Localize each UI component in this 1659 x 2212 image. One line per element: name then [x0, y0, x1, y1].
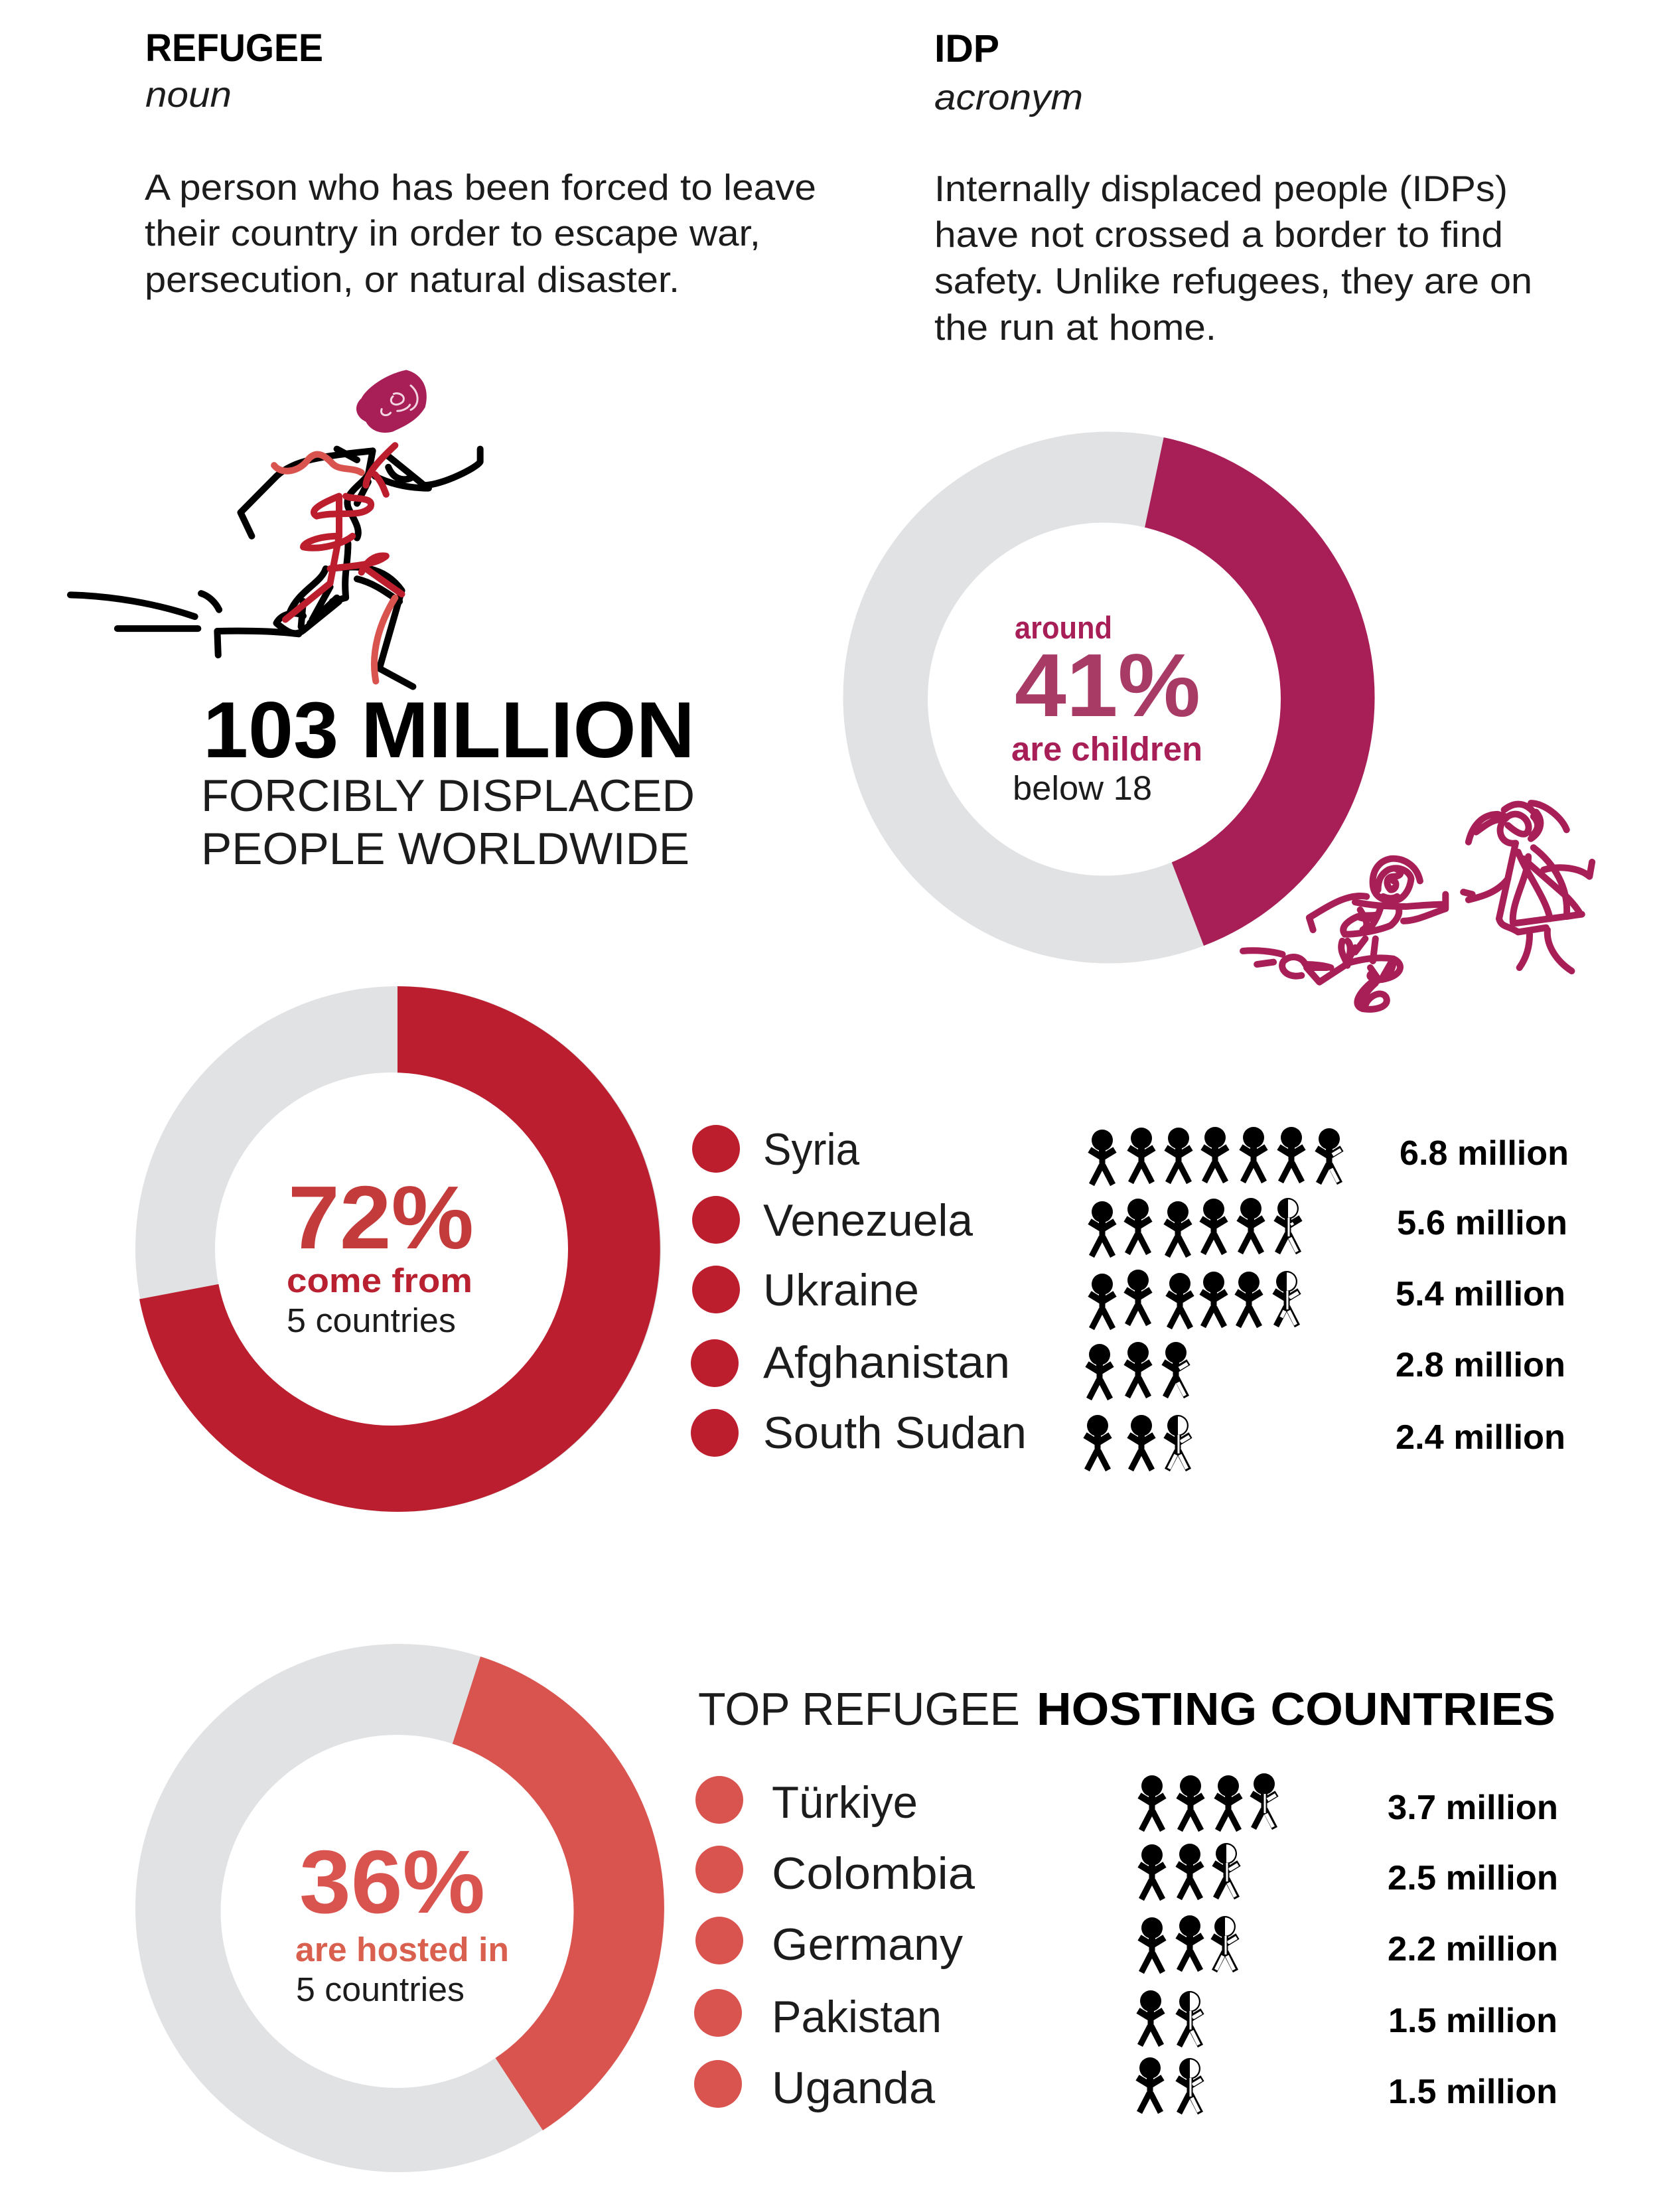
row: Syria — [692, 1124, 1569, 1185]
donut label: 41 percent: below 18 — [1013, 769, 1152, 807]
IDP definition text: have not crossed a border to find — [934, 214, 1503, 255]
row: Germany: 2.2 million — [1388, 1930, 1558, 1968]
illustration: running children — [1243, 803, 1592, 1009]
row: Afghanistan: Afghanistan — [763, 1337, 1010, 1388]
row: Colombia: 2.5 million — [1388, 1859, 1558, 1897]
row: Ukraine — [692, 1265, 1565, 1329]
row: Venezuela — [692, 1195, 1567, 1256]
heading: top refugee hosting countries: HOSTING COUNTRIES — [1037, 1683, 1555, 1735]
row: Venezuela: Venezuela — [763, 1195, 973, 1246]
IDP definition text — [934, 168, 1532, 348]
donut label: 36 percent: are hosted in — [295, 1931, 509, 1968]
list: origin countries — [691, 1124, 1569, 1470]
word class: noun: noun — [145, 75, 232, 115]
donut label: 36 percent: 36% — [299, 1832, 485, 1932]
headline: 103 million — [201, 686, 695, 874]
row: Germany: Germany — [772, 1919, 963, 1970]
donut chart: 41 percent children — [843, 431, 1375, 964]
donut label: 72 percent: come from — [287, 1262, 472, 1299]
IDP definition text: safety. Unlike refugees, they are on — [934, 260, 1532, 301]
boy figure — [1243, 859, 1445, 1009]
illustration: running figure — [70, 370, 480, 687]
row: Germany — [695, 1915, 1558, 1972]
row: South Sudan: South Sudan — [763, 1408, 1027, 1458]
row: Afghanistan — [691, 1337, 1565, 1399]
row: Pakistan: 1.5 million — [1388, 2002, 1557, 2040]
girl figure — [1463, 803, 1592, 971]
donut label: 72 percent: 72% — [288, 1167, 474, 1268]
row: Türkiye: Türkiye — [772, 1777, 918, 1828]
donut label: 36 percent — [295, 1832, 509, 2008]
donut label: 41 percent: 41% — [1015, 635, 1200, 735]
row: Syria: Syria — [763, 1124, 859, 1175]
row: Afghanistan: 2.8 million — [1396, 1346, 1565, 1384]
refugee definition text: A person who has been forced to leave — [145, 167, 816, 208]
donut label: 41 percent: around — [1015, 610, 1112, 645]
heading: IDP: IDP — [934, 27, 999, 70]
row: Türkiye — [695, 1773, 1558, 1830]
row: Pakistan — [694, 1989, 1557, 2046]
donut chart: 36 percent hosted — [135, 1644, 664, 2172]
row: South Sudan: 2.4 million — [1396, 1418, 1565, 1457]
panel: IDP definition — [934, 27, 1532, 348]
IDP definition text: the run at home. — [934, 307, 1216, 348]
refugee definition text: their country in order to escape war, — [145, 212, 760, 254]
IDP definition text: Internally displaced people (IDPs) — [934, 168, 1508, 209]
donut label: 72 percent — [287, 1167, 474, 1339]
row: Uganda: Uganda — [772, 2063, 935, 2113]
row: Ukraine: 5.4 million — [1396, 1275, 1565, 1313]
donut label: 36 percent: 5 countries — [296, 1970, 465, 2008]
row: Pakistan: Pakistan — [772, 1992, 942, 2042]
row: Venezuela: 5.6 million — [1397, 1204, 1567, 1242]
refugee definition text: persecution, or natural disaster. — [145, 259, 680, 300]
row: Uganda — [694, 2057, 1557, 2113]
row: Colombia — [695, 1842, 1558, 1899]
donut label: 72 percent: 5 countries — [287, 1301, 456, 1339]
headline: 103 million: FORCIBLY DISPLACED — [201, 771, 695, 821]
donut label: 41 percent: are children — [1011, 730, 1202, 768]
row: Uganda: 1.5 million — [1388, 2073, 1557, 2111]
panel: refugee definition — [145, 27, 816, 300]
heading: top refugee hosting countries: TOP REFUGEE — [698, 1683, 1020, 1735]
row: Colombia: Colombia — [772, 1848, 975, 1899]
row: South Sudan — [691, 1408, 1565, 1470]
row: Syria: 6.8 million — [1400, 1134, 1569, 1173]
heading: top refugee hosting countries — [698, 1683, 1555, 1735]
word class: acronym: acronym — [934, 78, 1083, 117]
refugee definition text — [145, 167, 816, 300]
donut chart: 72 percent from 5 countries — [135, 986, 661, 1512]
row: Ukraine: Ukraine — [763, 1265, 919, 1315]
list: hosting countries — [694, 1773, 1558, 2113]
heading: refugee: REFUGEE — [145, 27, 323, 70]
headline: 103 million: PEOPLE WORLDWIDE — [201, 824, 689, 874]
headline: 103 million: 103 MILLION — [203, 686, 695, 774]
donut label: 41 percent — [1011, 610, 1202, 807]
row: Türkiye: 3.7 million — [1388, 1789, 1558, 1827]
